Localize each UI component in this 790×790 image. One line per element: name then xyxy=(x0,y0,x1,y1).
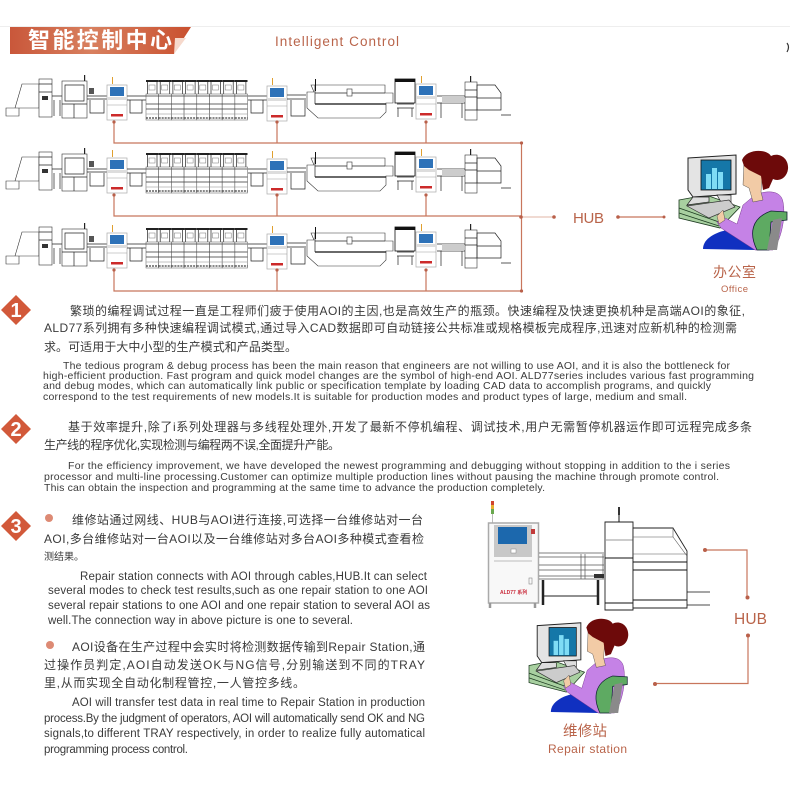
icon: office worker xyxy=(679,151,788,250)
section 1 english text: The tedious program & debug process has been the main reason that engineers are not willing to use AOI, and it is also the bottleneck for xyxy=(63,360,730,372)
english heading: Intelligent Control xyxy=(275,34,399,49)
section 3 chinese text b: 里,从而实现全自动化制程管控,一人管控多线。 xyxy=(44,675,305,690)
section 3 english text a: several modes to check test results,such as one repair station to one AOI xyxy=(48,585,428,597)
unloader xyxy=(605,507,710,610)
section 1 english text: correspond to the test requirements of new models.It is suitable for production modes and product types of large, medium and small. xyxy=(43,391,687,403)
connection wires to hub xyxy=(112,120,523,293)
section 2 english text xyxy=(44,460,730,494)
production line row 3 xyxy=(6,223,511,269)
section 2 badge xyxy=(1,414,31,444)
repair station label xyxy=(548,723,627,756)
section 3 chinese text a: 测结果。 xyxy=(44,550,84,563)
icon: repair station worker xyxy=(529,619,628,713)
bullet: repair station connection xyxy=(45,514,53,522)
conveyor xyxy=(539,553,604,605)
section 1 chinese text xyxy=(44,303,745,354)
section 2 chinese text: 基于效率提升,除了i系列处理器与多线程处理外,开发了最新不停机编程、调试技术,用户无需暂停机器运作即可远程完成多条 xyxy=(68,419,752,434)
light tower xyxy=(491,501,494,523)
repair station label: 维修站 xyxy=(563,723,607,740)
office label: 办公室 xyxy=(713,264,756,280)
section 2 chinese text xyxy=(44,419,752,452)
office hub connector: HUB xyxy=(573,210,604,227)
section 1 badge: 1 xyxy=(10,300,22,322)
section 2 badge: 2 xyxy=(10,419,22,441)
section 3 english text a xyxy=(47,571,430,627)
repair hub connector: HUB xyxy=(734,611,767,628)
section 2 chinese text: 生产线的程序优化,实现检测与编程两不误,全面提升产能。 xyxy=(44,437,340,452)
section 3 chinese text a: 维修站通过网线、HUB与AOI进行连接,可选择一台维修站对一台 xyxy=(72,512,423,527)
office label: Office xyxy=(721,284,748,295)
aoi cabinet: ALD77 系列 xyxy=(500,589,527,596)
section 1 english text xyxy=(43,360,754,403)
section 3 english text b: process.By the judgment of operators, AOI will automatically send OK and NG xyxy=(44,713,425,725)
repair machine illustration xyxy=(488,501,710,610)
section 3 english text b: signals,to different TRAY respectively, in order to realize fully automatical xyxy=(44,728,425,740)
section 1 english text: and debug modes, which can automatically link public or specification template by loading CAD data to accomplish programs, and quickly xyxy=(43,380,712,392)
section 3 chinese text a xyxy=(44,512,424,563)
section 3 english text a: Repair station connects with AOI through cables,HUB.It can select xyxy=(80,571,428,583)
section 1 chinese text: ALD77系列拥有多种快速编程调试模式,通过导入CAD数据即可自动链接公共标准或规格模板完成程序,迅速对应新机种的检测需 xyxy=(44,320,737,335)
aoi cabinet xyxy=(488,523,538,608)
section 3 chinese text a: AOI,多台维修站对一台AOI以及一台维修站对多台AOI多种模式查看检 xyxy=(44,531,424,546)
office hub connector xyxy=(519,210,666,227)
section 3 english text b xyxy=(44,697,425,756)
bullet: data transfer xyxy=(46,641,54,649)
section 3 chinese text b xyxy=(44,639,425,690)
section 3 english text b: AOI will transfer test data in real time to Repair Station in production xyxy=(72,697,425,709)
section 1 english text: high-efficient production. Fast program and quick model changes are the symbol of high-end AOI. ALD77series includes various fast programming xyxy=(43,370,754,382)
production lines diagram xyxy=(6,75,523,293)
section 2 english text: For the efficiency improvement, we have developed the newest programming and debugging without stopping in addition to the i series xyxy=(68,460,730,472)
office label xyxy=(713,264,756,295)
repair hub connector xyxy=(653,548,767,686)
section 3 badge: 3 xyxy=(10,516,22,538)
section 1 chinese text: 求。可适用于大中小型的生产模式和产品类型。 xyxy=(44,339,297,354)
section 2 english text: processor and multi-line processing.Customer can optimize multiple production lines without pausing the machine through promote control. xyxy=(44,471,719,483)
section 3 badge xyxy=(1,511,31,541)
section 3 chinese text b: 过操作员判定,AOI自动发送OK与NG信号,分别输送到不同的TRAY xyxy=(44,657,425,672)
repair station label: Repair station xyxy=(548,742,627,756)
title banner: 智能控制中心 xyxy=(28,28,172,53)
section 2 english text: This can obtain the inspection and programming at the same time to advance the production completely. xyxy=(44,482,545,494)
section 1 chinese text: 繁琐的编程调试过程一直是工程师们疲于使用AOI的主因,也是高效生产的瓶颈。快速编程及快速更换机种是高端AOI的象征, xyxy=(70,303,745,318)
section 3 english text b: programming process control. xyxy=(44,744,188,756)
production line row 2 xyxy=(6,148,511,194)
section 3 english text a: several repair stations to one AOI and one repair station to several AOI as xyxy=(48,600,430,612)
section 1 badge xyxy=(1,295,31,325)
section 3 english text a: well.The connection way in above picture is one to several. xyxy=(47,615,353,627)
production line row 1 xyxy=(6,75,511,121)
section 3 chinese text b: AOI设备在生产过程中会实时将检测数据传输到Repair Station,通 xyxy=(72,639,425,654)
